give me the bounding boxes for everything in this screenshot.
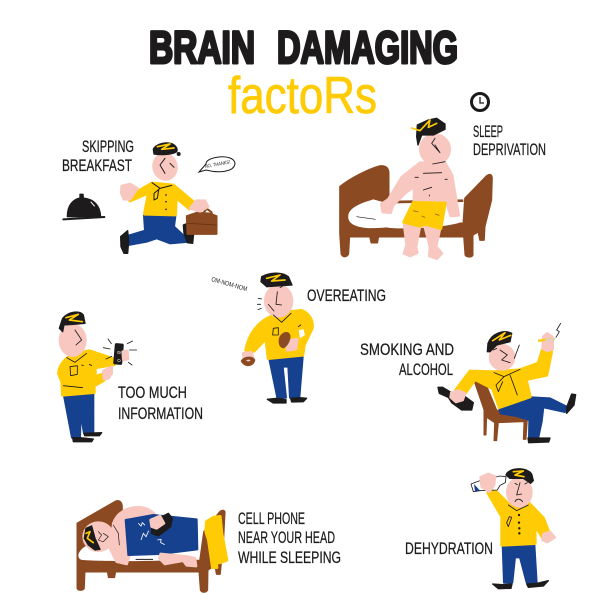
sound text: om-nom-nom: OM-NOM-NOM bbox=[210, 276, 248, 293]
character: man drinking from bottle bbox=[471, 469, 555, 589]
label: too much information: INFORMATION bbox=[118, 404, 203, 423]
label: skipping breakfast bbox=[62, 137, 134, 175]
label: too much information bbox=[118, 383, 203, 423]
label: smoking and alcohol bbox=[360, 340, 454, 379]
label: overeating: OVEREATING bbox=[307, 286, 386, 305]
character: man in bed with phone bbox=[77, 501, 227, 592]
subtitle: factoRs bbox=[228, 67, 377, 125]
character: man with phone: 8 bbox=[115, 351, 121, 354]
title bbox=[149, 22, 458, 73]
character: man with phone bbox=[59, 312, 137, 442]
label: skipping breakfast: SKIPPING bbox=[82, 137, 134, 156]
label: smoking and alcohol: SMOKING AND bbox=[360, 340, 454, 359]
character: man on chair bbox=[438, 323, 576, 443]
title: BRAIN bbox=[149, 22, 255, 73]
label: cell phone near your head: NEAR YOUR HEAD bbox=[238, 528, 335, 547]
label: smoking and alcohol: ALCOHOL bbox=[399, 360, 453, 379]
label: skipping breakfast: BREAKFAST bbox=[62, 156, 132, 175]
label: sleep deprivation: SLEEP bbox=[473, 122, 503, 141]
speech bubble: NO, THANKS! bbox=[204, 160, 231, 170]
panel: skipping breakfast bbox=[62, 137, 235, 253]
label: cell phone near your head bbox=[238, 509, 341, 567]
speech bubble bbox=[199, 157, 235, 172]
panel: cell phone near head bbox=[77, 501, 341, 592]
character: man with phone: 0 bbox=[115, 359, 121, 362]
character: man on bed bbox=[340, 118, 492, 259]
character: running man bbox=[121, 143, 217, 253]
panel: smoking and alcohol bbox=[360, 323, 576, 443]
label: cell phone near your head: WHILE SLEEPING bbox=[238, 548, 341, 567]
label: sleep deprivation: DEPRIVATION bbox=[473, 140, 546, 159]
label: dehydration: DEHYDRATION bbox=[405, 539, 493, 558]
panel: dehydration bbox=[405, 469, 555, 589]
icon: clock bbox=[472, 94, 488, 110]
icon: food cloche bbox=[63, 194, 104, 219]
panel: overeating bbox=[210, 273, 386, 403]
label: sleep deprivation bbox=[473, 122, 546, 159]
panel: sleep deprivation bbox=[340, 94, 546, 259]
label: too much information: TOO MUCH bbox=[118, 383, 187, 402]
label: cell phone near your head: CELL PHONE bbox=[238, 509, 305, 528]
title: DAMAGING bbox=[277, 22, 458, 73]
panel: too much information bbox=[59, 312, 203, 442]
character: man eating bbox=[241, 273, 312, 403]
